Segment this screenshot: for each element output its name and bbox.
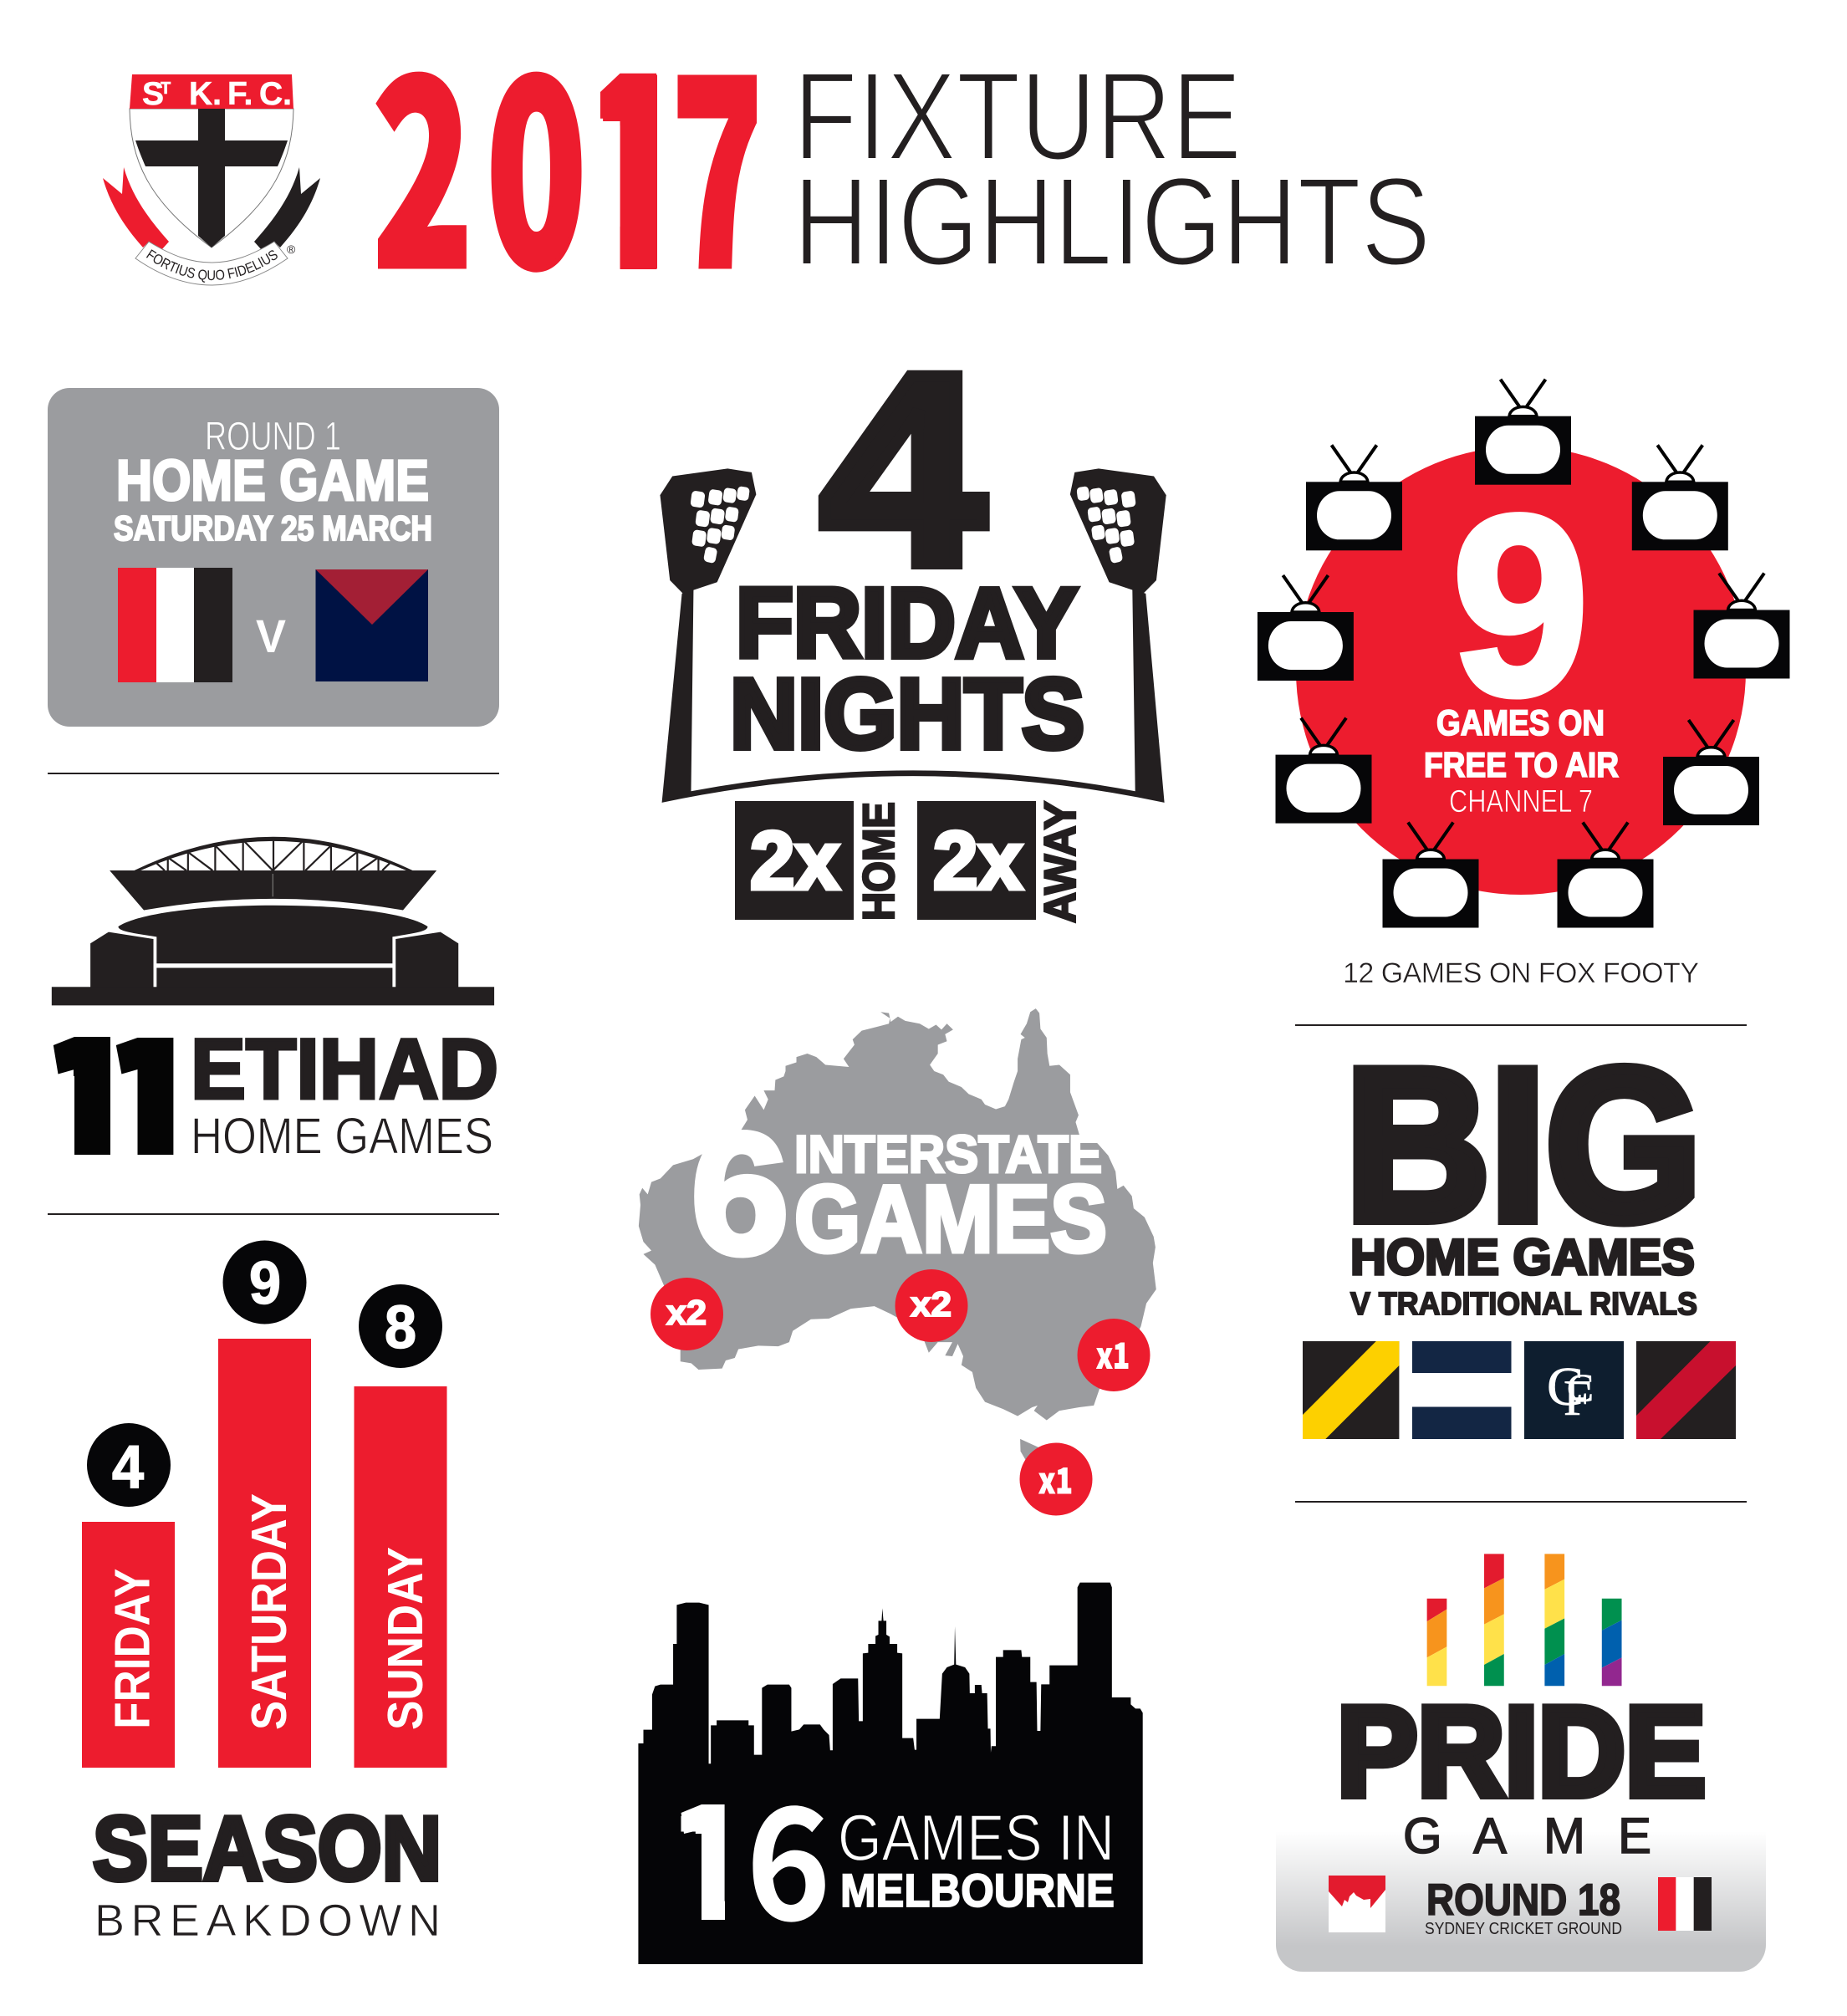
- crest: red ribbon tail: [103, 167, 169, 250]
- divider: [48, 1213, 499, 1215]
- marker: Perth x2: x2: [666, 1293, 707, 1332]
- heading: games: GAMES: [794, 1166, 1107, 1273]
- label: home games: HOME GAMES: [191, 1107, 493, 1164]
- label: games on: GAMES ON: [1436, 703, 1605, 743]
- date: SATURDAY 25 MARCH: [114, 508, 432, 548]
- heading: Etihad: ETIHAD: [191, 1022, 498, 1117]
- flag: Sydney: [1329, 1876, 1385, 1932]
- versus: V: [256, 610, 286, 662]
- crest: motto banner: [135, 242, 288, 285]
- marker: Sydney x1: x1: [1096, 1328, 1130, 1380]
- tile: 2x away: 2x: [933, 814, 1023, 906]
- tile: 2x home: [735, 801, 904, 921]
- icon: television lower right: [1663, 720, 1759, 825]
- panel: Friday nights: [660, 318, 1166, 923]
- value: 9: [222, 1241, 306, 1324]
- number 4: 4: [820, 318, 987, 622]
- crest: red header band: [130, 74, 293, 109]
- icon: television right: [1694, 574, 1789, 679]
- crest: club initials: C.: [259, 76, 292, 112]
- flag: Carlton: [1524, 1341, 1624, 1439]
- icon: stadium: [52, 837, 494, 1005]
- icon: television upper right: [1632, 445, 1728, 550]
- bar: Saturday: SATURDAY: [242, 1493, 297, 1730]
- label: channel 7: CHANNEL 7: [1449, 784, 1593, 819]
- panel: free to air games: [1258, 380, 1789, 989]
- icon: television bottom left: [1383, 823, 1478, 928]
- flag: Carlton: F: [1564, 1370, 1591, 1426]
- gradient base: [1276, 1831, 1766, 1972]
- flag: Melbourne: [316, 569, 428, 681]
- bar: Friday: FRIDAY: [105, 1569, 161, 1729]
- number 6: 6: [691, 1097, 789, 1290]
- value: 8: [359, 1284, 442, 1368]
- tile: 2x away: [917, 801, 1085, 923]
- marker: Tasmania x1: [1020, 1443, 1092, 1515]
- heading: game: GAME: [1403, 1808, 1651, 1864]
- crest: club initials: K.: [189, 76, 222, 112]
- crest: black ribbon tail: [254, 167, 320, 250]
- flag: St Kilda: [1658, 1877, 1712, 1931]
- panel: round 1 home game: [48, 388, 499, 727]
- bar: Friday: [82, 1522, 175, 1768]
- title line 1: FIXTURE: [793, 46, 1242, 186]
- number 11: [42, 972, 186, 1198]
- crest: motto text: FORTIUS QUO FIDELIUS: [145, 249, 278, 283]
- label: traditional rivals: V TRADITIONAL RIVALS: [1350, 1287, 1697, 1322]
- icon: television left: [1258, 575, 1354, 681]
- crest: club initials: S: [142, 76, 164, 112]
- value: 4: [87, 1423, 171, 1507]
- bar: Sunday: [355, 1386, 446, 1768]
- heading: home game: HOME GAME: [116, 448, 429, 513]
- panel: games in Melbourne: [638, 1583, 1143, 1965]
- divider: [48, 773, 499, 774]
- label: home games: HOME GAMES: [1350, 1229, 1695, 1285]
- value: 9: 9: [249, 1250, 281, 1317]
- heading: season: SEASON: [93, 1798, 441, 1900]
- header: club crest: [103, 74, 320, 286]
- value: 4: 4: [112, 1434, 144, 1501]
- marker: Perth x2: [651, 1278, 723, 1350]
- flag: St Kilda: [118, 568, 232, 682]
- panel background: [48, 388, 499, 727]
- map: Australia: [639, 1008, 1156, 1462]
- icon: television top: [1475, 380, 1571, 485]
- panel: big home games: [1303, 1023, 1736, 1439]
- header: title: [793, 46, 1431, 292]
- number 11: 11: [50, 972, 176, 1198]
- heading: breakdown: BREAKDOWN: [94, 1896, 441, 1946]
- icon: rainbow bars: [1427, 1554, 1622, 1686]
- marker: Adelaide x2: [895, 1269, 968, 1342]
- divider: [1295, 1024, 1747, 1026]
- tile: 2x home: HOME: [855, 802, 904, 921]
- left lamp: [660, 468, 756, 594]
- heading: pride: PRIDE: [1337, 1681, 1706, 1823]
- flag: Carlton: C: [1547, 1356, 1584, 1417]
- crest: registered mark: ®: [287, 242, 296, 256]
- tile: 2x home: 2x: [750, 814, 839, 906]
- label: Fox Footy: 12 GAMES ON FOX FOOTY: [1343, 957, 1699, 989]
- flag: Richmond: [1303, 1341, 1399, 1439]
- skyline silhouette: [638, 1583, 1143, 1964]
- flag: Essendon: [1636, 1341, 1736, 1439]
- crest: motto path: [140, 253, 284, 280]
- crest: black cross upright: [198, 109, 225, 248]
- panel: Etihad home games: [42, 837, 498, 1198]
- number 9: 9: [1452, 462, 1589, 749]
- title line 2: HIGHLIGHTS: [793, 151, 1431, 292]
- icon: floodlight frame: [660, 468, 1166, 803]
- icon: television upper left: [1306, 445, 1402, 550]
- heading: interstate: INTERSTATE: [794, 1125, 1102, 1184]
- heading: Friday: FRIDAY: [736, 569, 1078, 679]
- value: 8: 8: [385, 1294, 416, 1361]
- panel: interstate games: [639, 1008, 1156, 1515]
- panel: season breakdown: [82, 1241, 446, 1946]
- icon: television bottom right: [1557, 823, 1654, 928]
- label: free to air: FREE TO AIR: [1424, 745, 1619, 784]
- flag: Geelong: [1412, 1341, 1512, 1439]
- label: Melbourne: MELBOURNE: [840, 1864, 1115, 1916]
- number 16: 16: [661, 1739, 831, 1965]
- crest: shield: [130, 109, 293, 248]
- crest: black horizontal band: [135, 140, 288, 166]
- heading: Nights: NIGHTS: [730, 659, 1084, 769]
- crest: club initials: T: [161, 79, 171, 98]
- panel: pride game: [1276, 1554, 1766, 1972]
- right lamp: [1070, 468, 1166, 594]
- bar: Sunday: SUNDAY: [378, 1547, 433, 1730]
- divider: [1295, 1501, 1747, 1503]
- flag: Carlton: C: [1567, 1366, 1594, 1411]
- red circle: [1296, 447, 1746, 895]
- marker: Tasmania x1: x1: [1038, 1453, 1073, 1504]
- label: games in: GAMES IN: [838, 1801, 1115, 1875]
- bar: Saturday: [218, 1339, 311, 1768]
- marker: Adelaide x2: x2: [911, 1284, 952, 1324]
- marker: Sydney x1: [1077, 1319, 1151, 1391]
- crest: club initials: F.: [227, 76, 253, 112]
- heading: big: BIG: [1345, 1023, 1702, 1265]
- label: round 1: ROUND 1: [205, 415, 341, 459]
- frame posts and arc: [662, 589, 1165, 803]
- label: round 18: ROUND 18: [1426, 1876, 1620, 1925]
- label: venue: SYDNEY CRICKET GROUND: [1425, 1919, 1622, 1938]
- icon: television lower left: [1276, 718, 1371, 824]
- tile: 2x away: AWAY: [1036, 801, 1085, 923]
